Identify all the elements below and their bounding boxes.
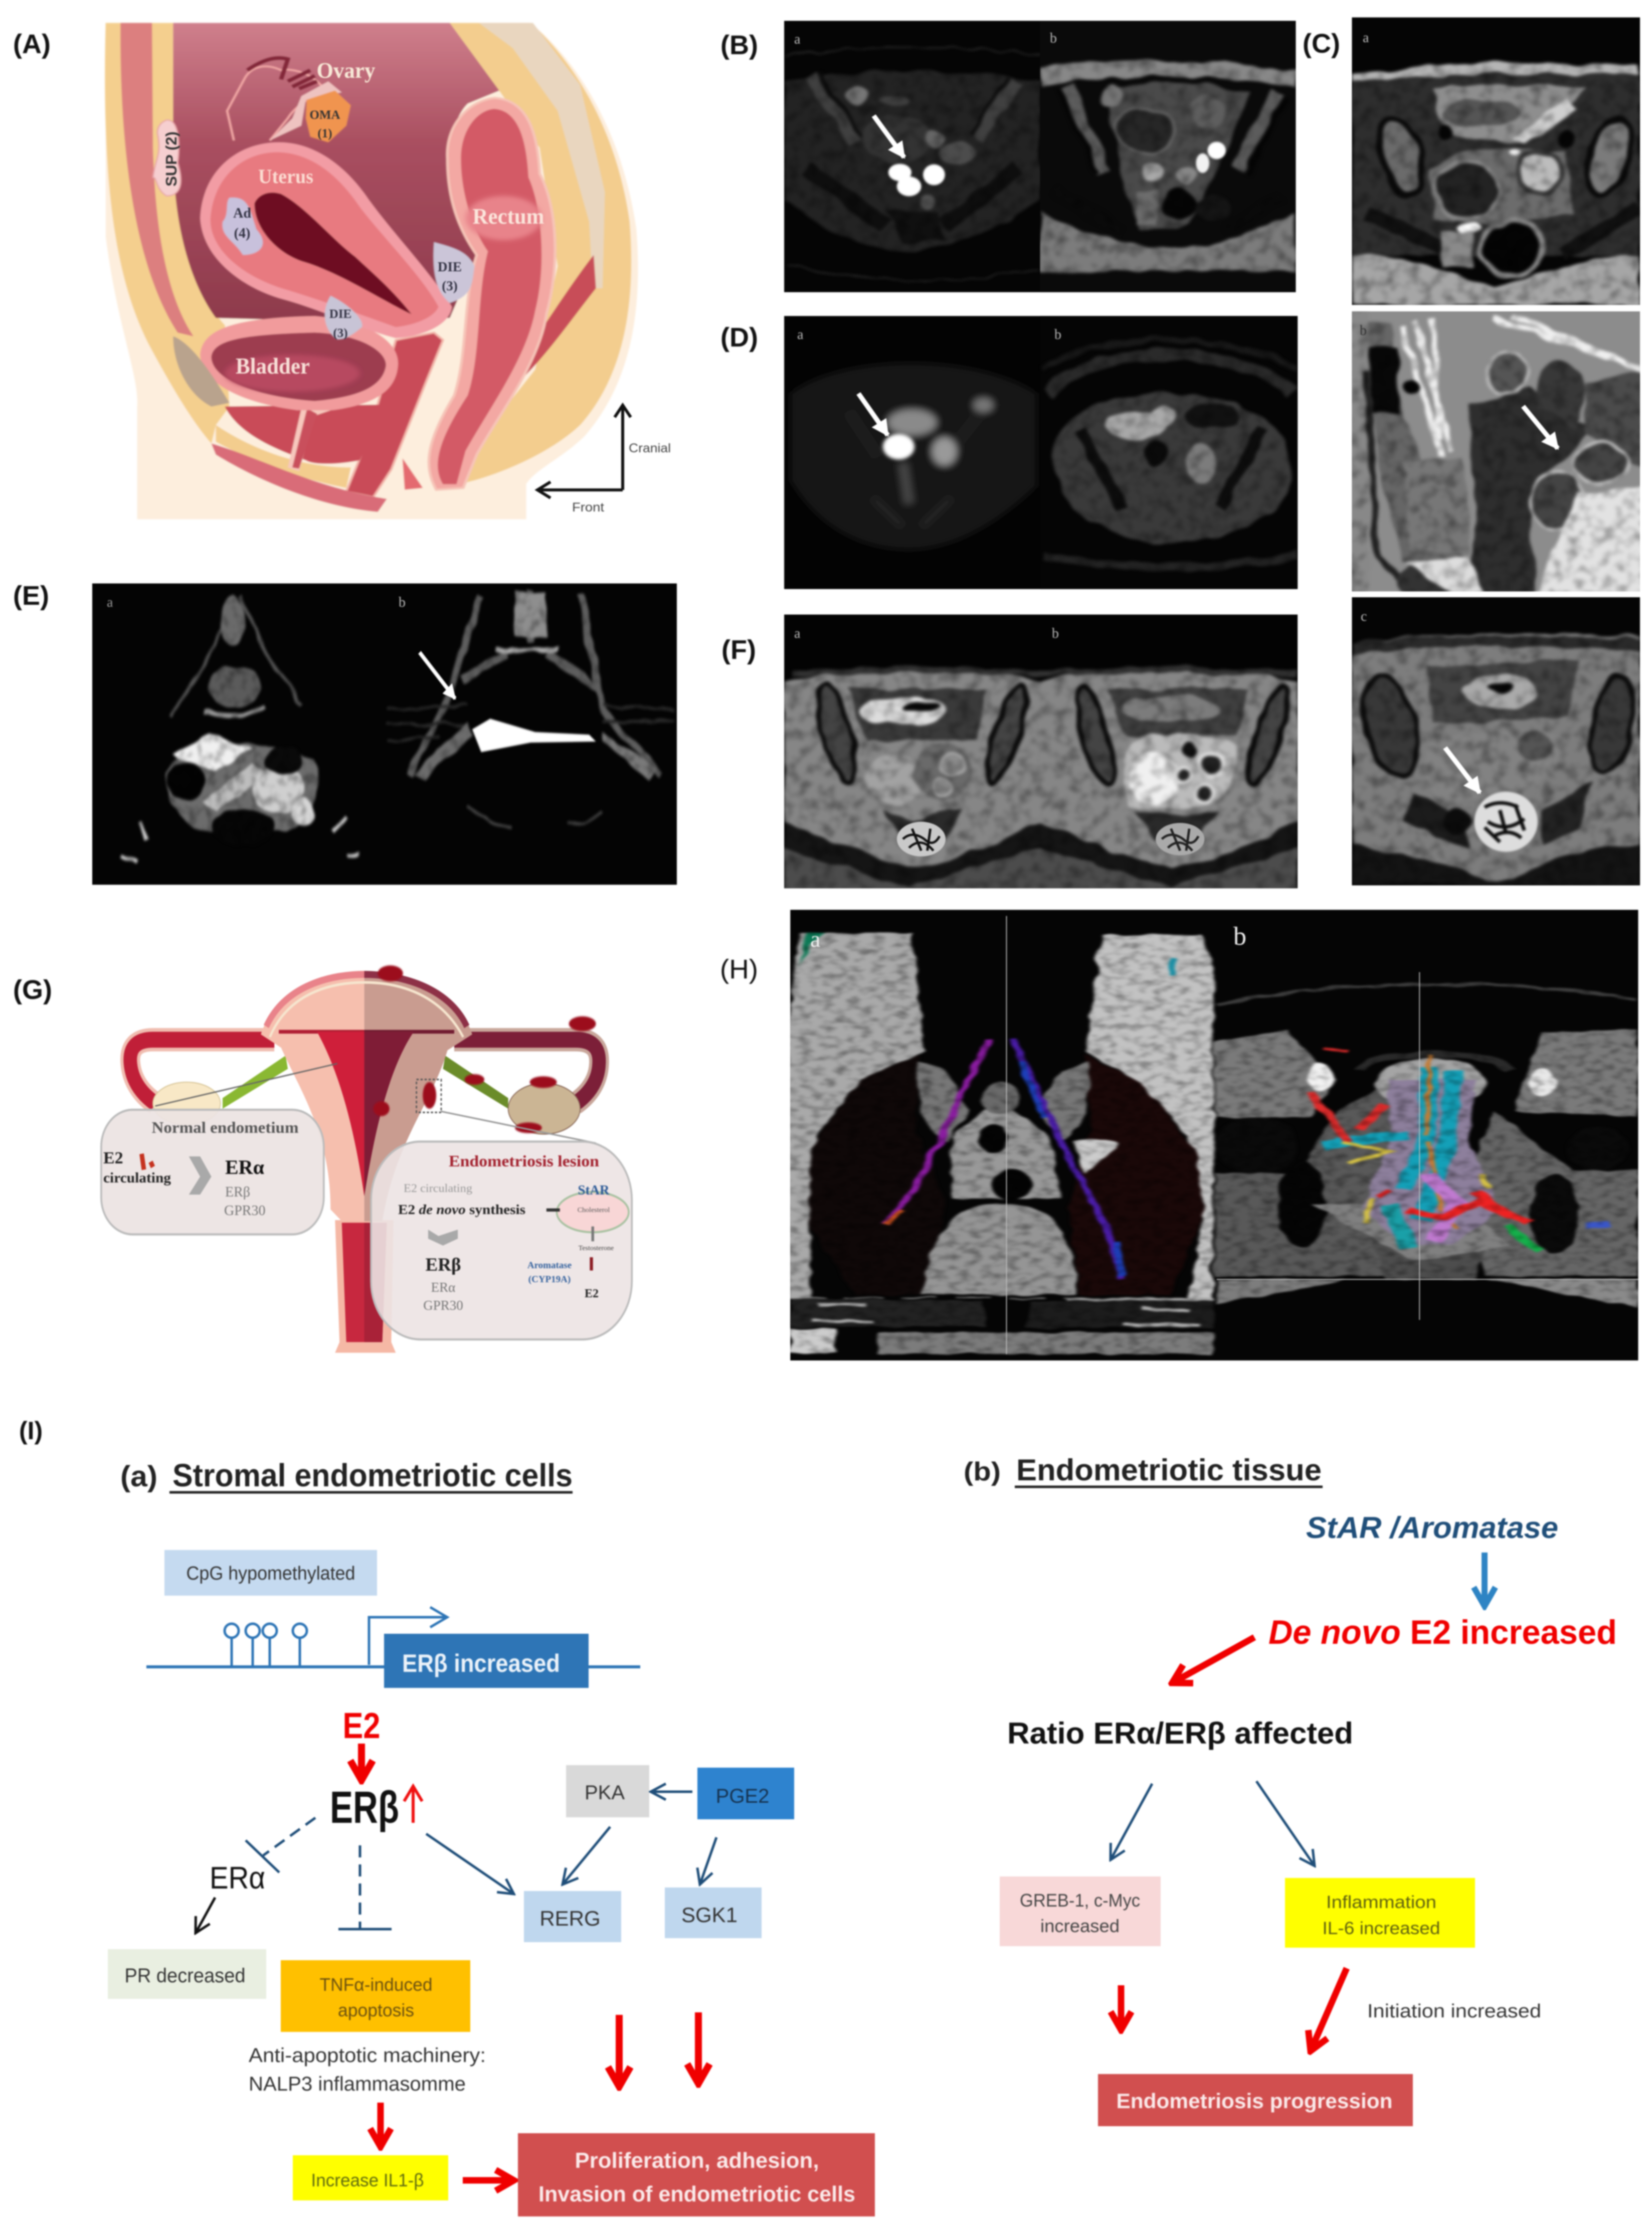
heading (b): (b) bbox=[964, 1457, 1001, 1486]
panel B: axial MRI pair bbox=[784, 21, 1296, 292]
panel label C: (C) bbox=[1303, 29, 1340, 59]
gene line with CpG lollipops bbox=[146, 1607, 640, 1667]
box: SGK1 bbox=[665, 1887, 762, 1938]
inhibition: ER beta to TNF alpha bbox=[338, 1845, 392, 1929]
heading: Stromal endometriotic cells: Stromal endometriotic cells bbox=[172, 1457, 573, 1493]
subpanel letters bbox=[794, 30, 1369, 641]
box: ER beta increased: ERβ increased bbox=[402, 1649, 560, 1677]
heading: Endometriotic tissue: Endometriotic tissue bbox=[1016, 1453, 1322, 1487]
text: E2 circulating lesion: E2 circulating bbox=[404, 1182, 473, 1194]
box: PKA bbox=[566, 1765, 649, 1817]
heading (a): (a) bbox=[120, 1460, 157, 1493]
subpanel letters: b bbox=[1052, 626, 1059, 641]
arrow: inflammation to progression bbox=[1311, 1968, 1347, 2051]
text: anti-apoptotic machinery bbox=[249, 2044, 486, 2095]
subpanel letters: a bbox=[797, 327, 804, 342]
panel label I: (I) bbox=[19, 1417, 43, 1445]
text: StAR: StAR bbox=[578, 1182, 610, 1197]
box: CpG hypomethylated: CpG hypomethylated bbox=[187, 1563, 355, 1584]
box: GREB-1, c-Myc increased: increased bbox=[1040, 1916, 1120, 1936]
box: CpG hypomethylated bbox=[164, 1550, 377, 1596]
arrow: PGE2 to PKA bbox=[651, 1790, 692, 1793]
box: Endometriosis progression: Endometriosis progression bbox=[1116, 2089, 1393, 2113]
subpanel letters H: a bbox=[810, 926, 820, 952]
panel E: coronal MRI pair bbox=[92, 583, 677, 885]
text: ER alpha: ERα bbox=[210, 1861, 265, 1896]
panel label F: (F) bbox=[721, 635, 756, 665]
panel C b: sagittal T2 MRI bbox=[1348, 307, 1646, 599]
subpanel letters: a bbox=[1363, 30, 1369, 46]
panel H: tractography MRI pair bbox=[787, 910, 1638, 1360]
text: StAR / Aromatase: StAR /Aromatase bbox=[1306, 1511, 1558, 1544]
panel A: sagittal pelvic anatomy illustration bbox=[105, 23, 671, 519]
text: ER beta list lesion: GPR30 bbox=[423, 1298, 463, 1313]
box: Inflammation IL-6 increased: IL-6 increased bbox=[1323, 1919, 1440, 1938]
box: Endometriosis progression bbox=[1098, 2074, 1413, 2126]
lesion label: DIE (3) posterior: (3) bbox=[442, 278, 458, 293]
label: Cranial: Cranial bbox=[629, 441, 671, 455]
arrow: IL1 beta to proliferation bbox=[463, 2177, 514, 2183]
subpanel letters: b bbox=[1050, 31, 1057, 46]
illustration shapes bbox=[105, 23, 638, 519]
subpanel letters H bbox=[810, 922, 1246, 952]
box: Inflammation IL-6 increased: Inflammation bbox=[1326, 1893, 1436, 1912]
arrow: PGE2 to SGK1 bbox=[700, 1837, 716, 1884]
box: TNF alpha induced apoptosis: apoptosis bbox=[338, 2000, 414, 2020]
panel label A: (A) bbox=[13, 29, 51, 59]
box: GREB-1, c-Myc increased bbox=[1000, 1876, 1161, 1946]
uterus illustration bbox=[101, 965, 632, 1353]
box: Increase IL1-beta: Increase IL1-β bbox=[311, 2170, 424, 2190]
box: SGK1: SGK1 bbox=[681, 1903, 738, 1927]
subpanel letters: c bbox=[1361, 609, 1367, 624]
panel label B: (B) bbox=[720, 30, 758, 60]
text: De novo E2 increased: De novo E2 increased bbox=[1268, 1613, 1617, 1651]
panel C c: axial post-contrast MRI bbox=[1352, 597, 1641, 886]
box: Inflammation IL-6 increased bbox=[1285, 1878, 1475, 1948]
text: Testosterone: Testosterone bbox=[579, 1245, 614, 1252]
lesion label: Ad (4): (4) bbox=[234, 226, 250, 241]
subpanel letters E: b bbox=[399, 595, 406, 610]
box: proliferation, adhesion, invasion: Invasion of endometriotic cells bbox=[538, 2182, 855, 2206]
arrow bbox=[874, 116, 904, 157]
arrow: E2 to ER beta bbox=[358, 1744, 365, 1780]
panel I(a): stromal endometriotic cells pathway bbox=[108, 1457, 875, 2216]
panel I(b): endometriotic tissue pathway bbox=[964, 1453, 1617, 2126]
text: Cholesterol: Cholesterol bbox=[578, 1207, 610, 1214]
subpanel letters: b bbox=[1360, 323, 1367, 338]
subpanel letters E: a bbox=[107, 595, 113, 610]
panel C a: axial T2 MRI bbox=[1352, 18, 1640, 305]
organ label: Bladder: Bladder bbox=[236, 353, 310, 379]
box: GREB-1, c-Myc increased: GREB-1, c-Myc bbox=[1020, 1890, 1140, 1911]
panel label E: (E) bbox=[13, 581, 49, 611]
panel label D: (D) bbox=[720, 322, 758, 353]
arrow: GREB to progression bbox=[1118, 1985, 1124, 2030]
lesion label: DIE (3) posterior: DIE bbox=[438, 259, 462, 274]
box: PGE2: PGE2 bbox=[716, 1785, 769, 1807]
arrow: ER alpha to PR bbox=[196, 1898, 215, 1933]
box: Increase IL1-beta bbox=[293, 2155, 448, 2200]
box: proliferation, adhesion, invasion: Proliferation, adhesion, bbox=[575, 2148, 819, 2173]
arrow: RERG to proliferation bbox=[616, 2015, 623, 2087]
box: TNF alpha induced apoptosis: TNFα-induced bbox=[320, 1974, 432, 1995]
panel label G: (G) bbox=[13, 975, 52, 1005]
text: anti-apoptotic machinery: Anti-apoptotic machinery: bbox=[249, 2044, 486, 2067]
box: RERG bbox=[524, 1891, 621, 1942]
subpanel letters: a bbox=[794, 626, 801, 641]
subpanel letters E bbox=[107, 595, 406, 610]
panel F: contrast-enhanced MRI pair bbox=[784, 615, 1298, 894]
text: E2 de novo synthesis: E2 de novo synthesis bbox=[398, 1202, 525, 1217]
organ label: Ovary: Ovary bbox=[317, 58, 375, 83]
text: ER alpha list normal: ERα bbox=[225, 1156, 264, 1178]
text: ER alpha list normal: ERβ bbox=[225, 1184, 250, 1200]
organ label: Uterus: Uterus bbox=[258, 165, 313, 188]
callout heading: Normal endometium: Normal endometium bbox=[151, 1118, 299, 1136]
arrow bbox=[858, 394, 888, 435]
subpanel letters H: b bbox=[1233, 922, 1246, 951]
text: Aromatase: (CYP19A) bbox=[528, 1274, 571, 1285]
arrow: to IL1 beta bbox=[377, 2103, 384, 2147]
panel D: diffusion MRI pair bbox=[784, 316, 1298, 589]
arrow: De novo to ratio bbox=[1172, 1637, 1254, 1683]
text: E2 circulating: circulating bbox=[103, 1170, 171, 1186]
arrow bbox=[1445, 748, 1480, 793]
panel label H: (H) bbox=[720, 954, 758, 984]
arrow: PKA to RERG bbox=[563, 1827, 610, 1884]
arrow: ER beta to RERG bbox=[426, 1834, 514, 1894]
box: PGE2 bbox=[697, 1768, 794, 1819]
text: E2 product: E2 bbox=[585, 1287, 599, 1300]
arrow bbox=[420, 652, 455, 699]
subpanel letters: b bbox=[1054, 327, 1061, 342]
lesion label: SUP (2): SUP (2) bbox=[162, 131, 180, 187]
box: TNF alpha induced apoptosis bbox=[281, 1960, 470, 2032]
box: ER beta increased bbox=[384, 1634, 589, 1688]
text: E2 circulating: E2 bbox=[103, 1149, 123, 1167]
lesion label: DIE (3) anterior: (3) bbox=[333, 326, 348, 340]
lesion label: OMA (1): OMA bbox=[309, 108, 340, 122]
callout: endometriosis lesion bbox=[371, 1141, 632, 1339]
text: ER beta: ERβ bbox=[330, 1783, 399, 1833]
box: proliferation, adhesion, invasion bbox=[518, 2133, 875, 2216]
panel G: uterus diagram with callouts bbox=[101, 965, 632, 1353]
text: anti-apoptotic machinery: NALP3 inflammasomme bbox=[249, 2073, 466, 2095]
text: Initiation increased: Initiation increased bbox=[1367, 2001, 1541, 2022]
callout: normal endometrium bbox=[101, 1110, 324, 1235]
orientation arrows bbox=[537, 405, 631, 498]
callout heading: Endometriosis lesion: Endometriosis lesion bbox=[449, 1152, 599, 1170]
box: PR decreased bbox=[108, 1949, 266, 1999]
text: Ratio ER alpha / ER beta affected: Ratio ERα/ERβ affected bbox=[1007, 1716, 1353, 1750]
arrow: SGK1 to proliferation bbox=[695, 2012, 702, 2084]
text: ER beta list lesion: ERα bbox=[431, 1280, 455, 1295]
text: E2: E2 bbox=[343, 1706, 380, 1746]
lesion label: OMA (1): (1) bbox=[317, 127, 332, 140]
box: PR decreased: PR decreased bbox=[124, 1965, 246, 1987]
subpanel letters: a bbox=[794, 32, 801, 47]
arrow: ratio to GREB bbox=[1111, 1784, 1152, 1860]
arrow: ratio to inflammation bbox=[1256, 1781, 1315, 1866]
organ label: Rectum: Rectum bbox=[472, 204, 544, 229]
inhibition: ER beta to ER alpha bbox=[246, 1818, 315, 1872]
label: Front: Front bbox=[572, 500, 604, 514]
box: PKA: PKA bbox=[585, 1782, 625, 1804]
lesion label: Ad (4): Ad bbox=[233, 206, 251, 221]
text: ER beta list lesion: ERβ bbox=[426, 1255, 461, 1275]
text: ER alpha list normal: GPR30 bbox=[224, 1203, 265, 1219]
box: RERG: RERG bbox=[539, 1907, 601, 1930]
arrow: StAR to De novo E2 bbox=[1482, 1553, 1488, 1606]
lesion label: DIE (3) anterior: DIE bbox=[329, 307, 351, 321]
arrow bbox=[1523, 406, 1558, 448]
MRI panels B, C, D, F bbox=[784, 18, 1646, 894]
arrow: ER beta up bbox=[404, 1786, 422, 1823]
text: Aromatase: Aromatase bbox=[527, 1260, 572, 1271]
